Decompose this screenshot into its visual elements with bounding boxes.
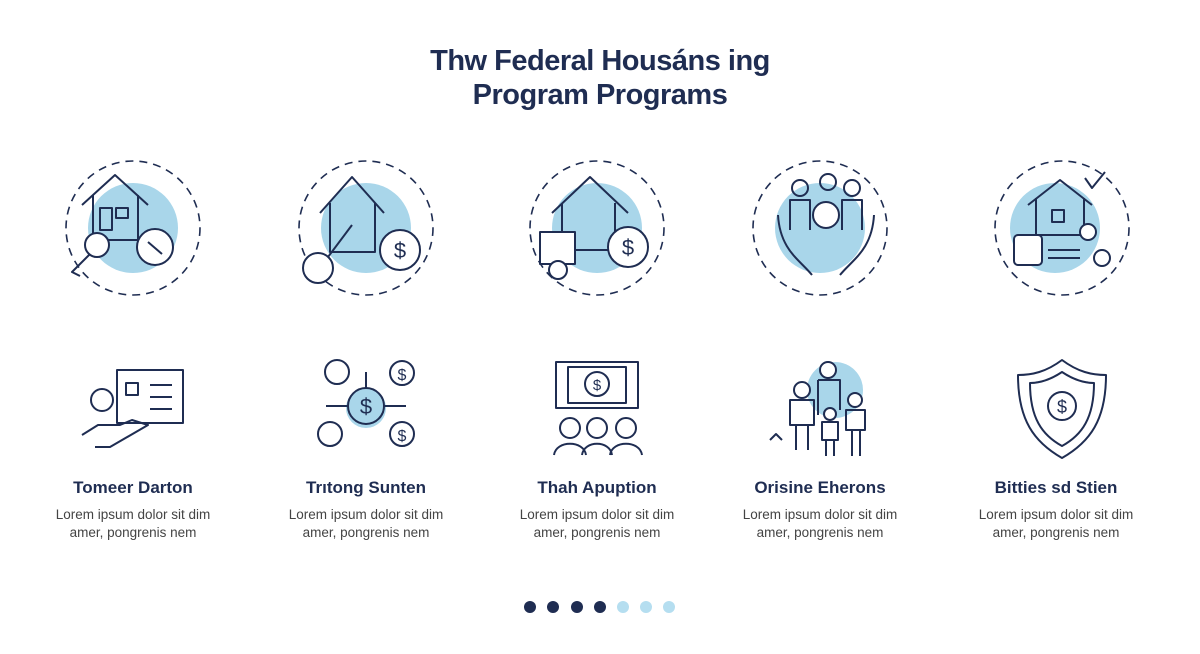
text block 4: Orisine Eherons xyxy=(754,478,886,497)
text block 2 xyxy=(289,478,443,540)
title xyxy=(430,45,770,111)
text block 5 xyxy=(979,478,1133,540)
icon: house truck dollar xyxy=(530,161,664,295)
icon: shield dollar xyxy=(1018,360,1106,458)
icon: house keys xyxy=(66,161,200,295)
text block 2: amer, pongrenis nem xyxy=(303,525,429,540)
icon: money flow: $ xyxy=(398,428,407,445)
text block 2: Lorem ipsum dolor sit dim xyxy=(289,507,443,522)
text block 5: Lorem ipsum dolor sit dim xyxy=(979,507,1133,522)
icon: house truck dollar: $ xyxy=(622,235,634,260)
icon: house key dollar xyxy=(299,161,433,295)
text block 1 xyxy=(56,478,210,540)
icon: money flow xyxy=(318,360,414,446)
icon: shield dollar: $ xyxy=(1057,397,1067,417)
icon: money flow: $ xyxy=(398,367,407,384)
title: Thw Federal Housáns ing xyxy=(430,45,770,77)
text block 1: Lorem ipsum dolor sit dim xyxy=(56,507,210,522)
text block 3 xyxy=(520,478,674,540)
title: Program Programs xyxy=(473,79,727,111)
pagination dots xyxy=(524,601,675,613)
icon: family xyxy=(770,362,865,456)
text block 1: Tomeer Darton xyxy=(73,478,193,497)
text block 1: amer, pongrenis nem xyxy=(70,525,196,540)
text block 5: Bitties sd Stien xyxy=(995,478,1117,497)
icon: house key dollar: $ xyxy=(394,238,406,263)
text block 2: Trıtong Sunten xyxy=(306,478,426,497)
icon: money people xyxy=(554,362,642,455)
text block 4: Lorem ipsum dolor sit dim xyxy=(743,507,897,522)
icon: hands people dollar xyxy=(753,161,887,295)
text block 4 xyxy=(743,478,897,540)
text block 3: Lorem ipsum dolor sit dim xyxy=(520,507,674,522)
text block 3: amer, pongrenis nem xyxy=(534,525,660,540)
icon: money people: $ xyxy=(593,377,602,394)
icon: money flow: $ xyxy=(360,394,372,419)
icon: hand id card xyxy=(82,370,183,447)
icon: house shield check xyxy=(995,161,1129,295)
text block 3: Thah Apuption xyxy=(537,478,657,497)
text block 5: amer, pongrenis nem xyxy=(993,525,1119,540)
text block 4: amer, pongrenis nem xyxy=(757,525,883,540)
